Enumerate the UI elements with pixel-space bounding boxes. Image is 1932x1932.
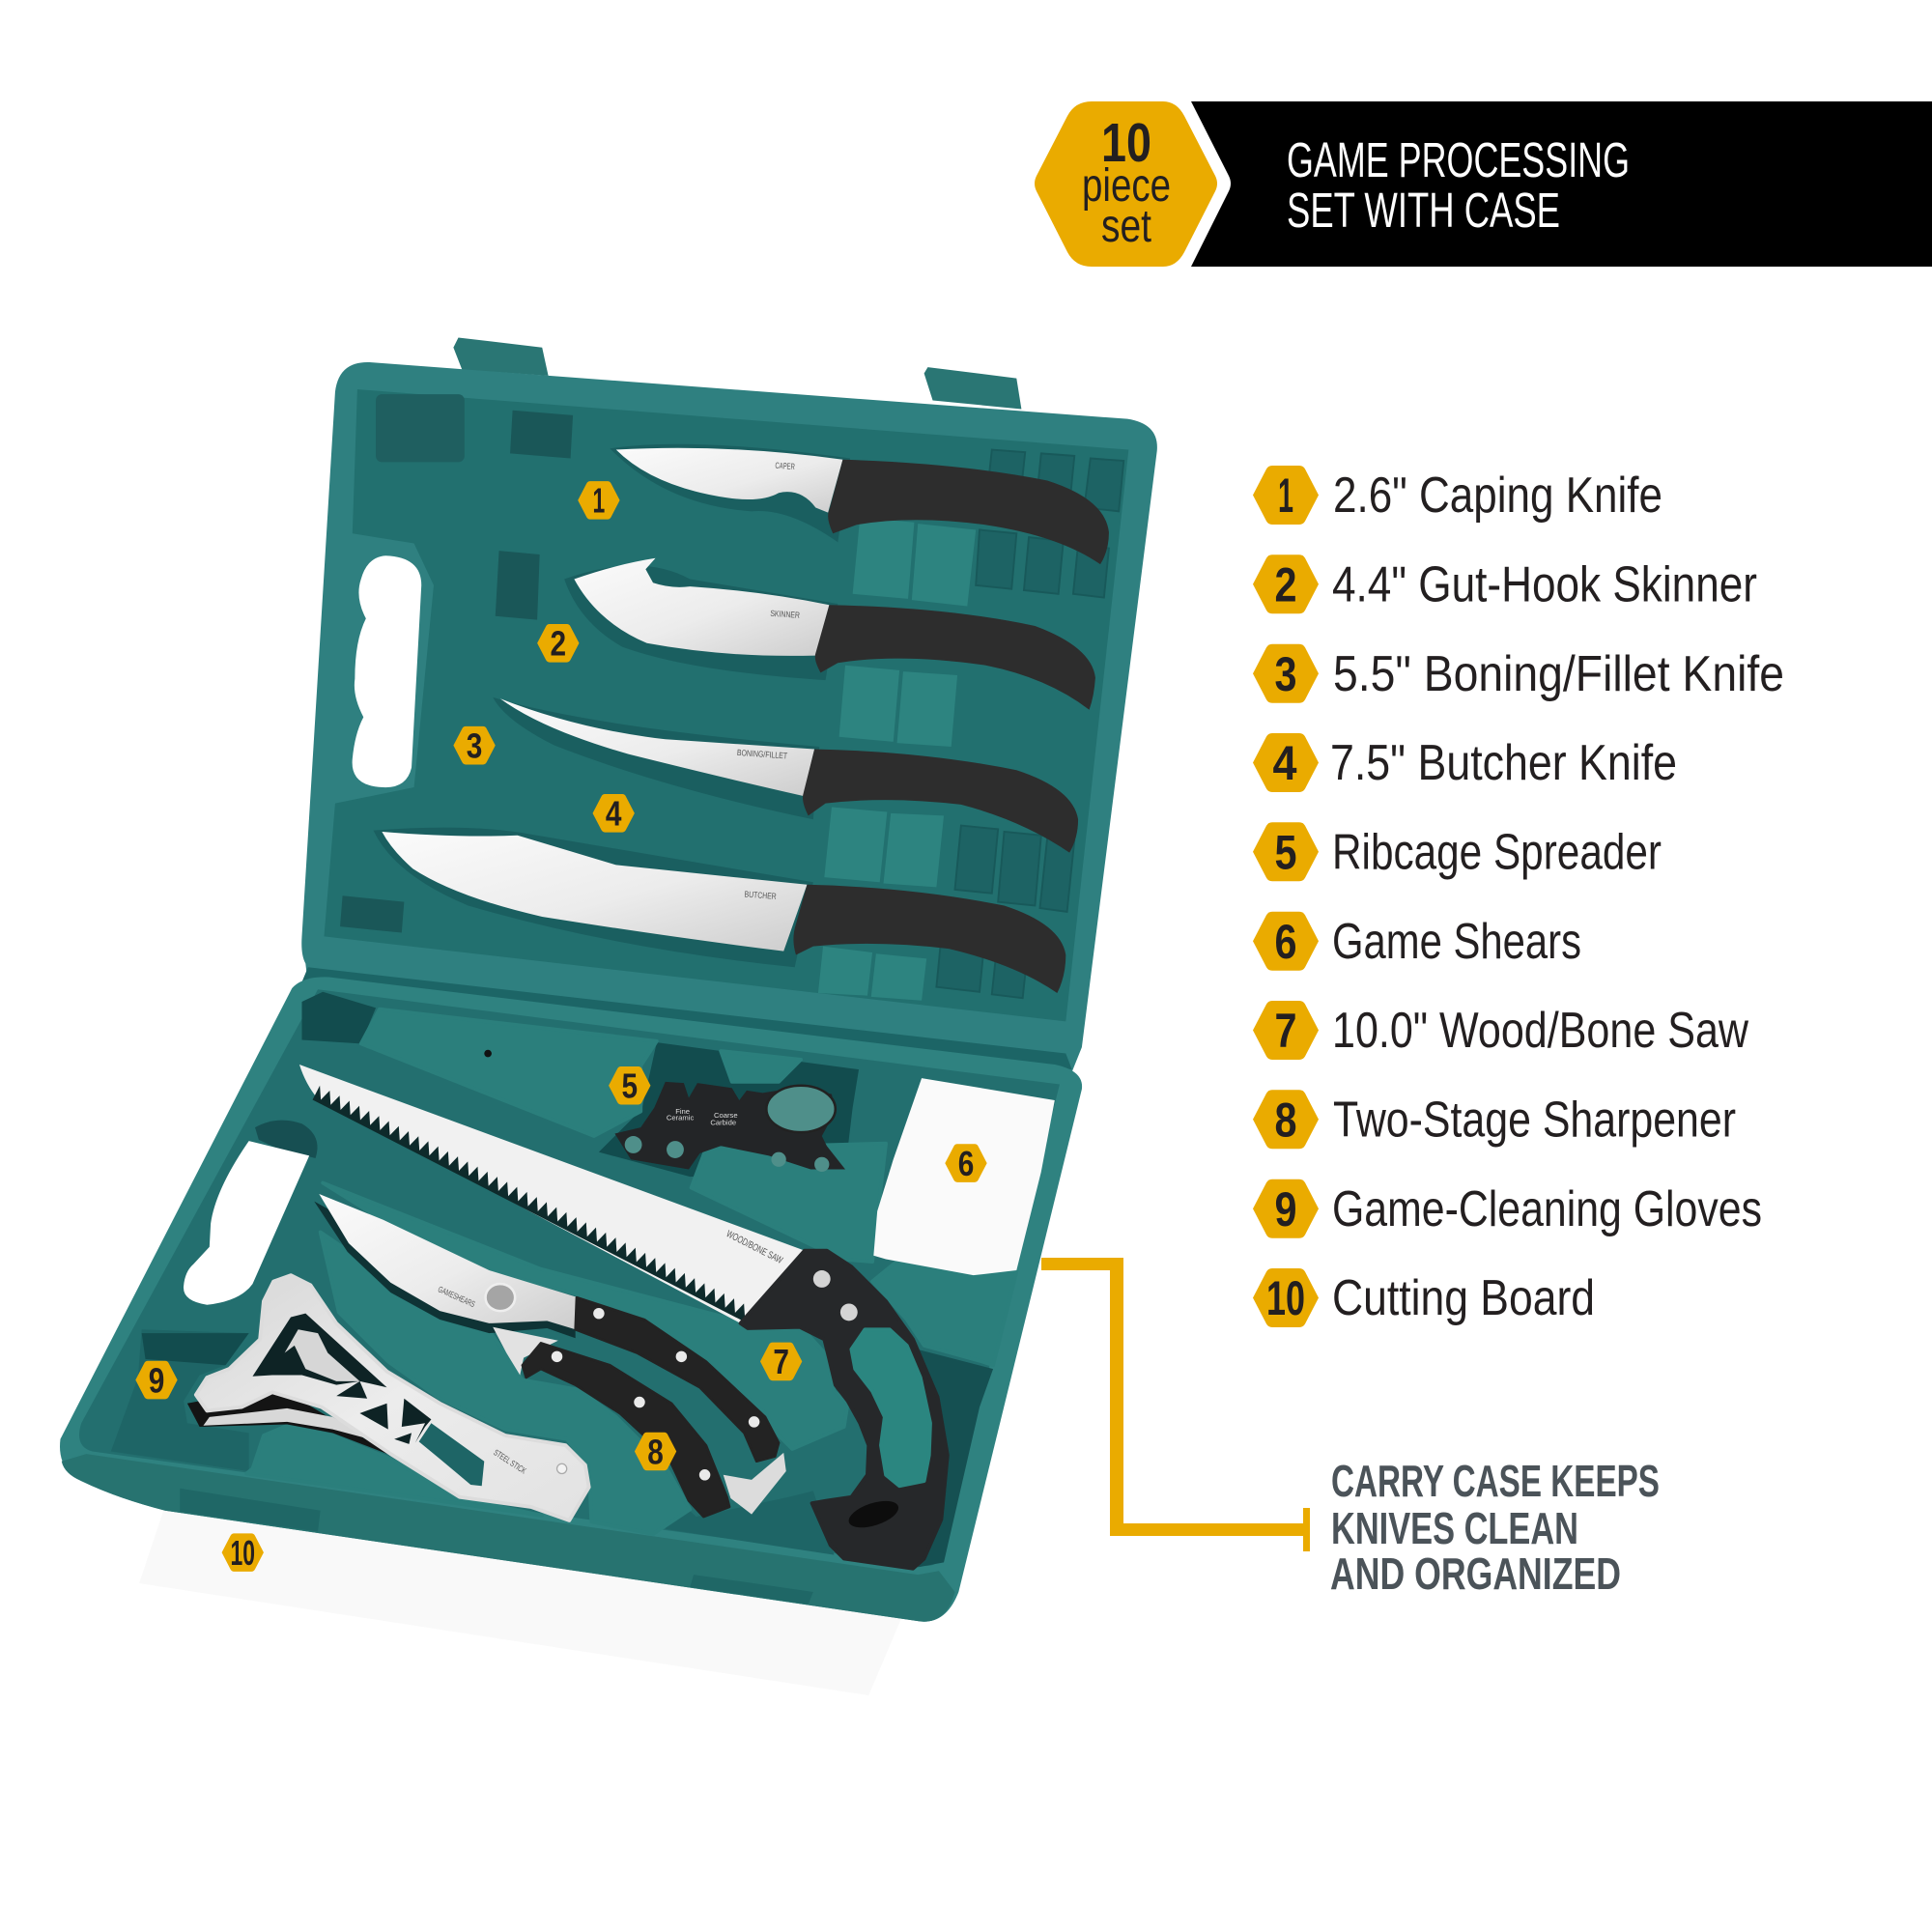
steel stick tool [187,1275,589,1520]
header banner [1035,101,1932,267]
caper blade [616,448,842,513]
hexagon text [1082,112,1171,252]
ribcage spreader tool: Coarse [714,1111,738,1120]
base outer shell [60,977,1082,1622]
marker 4 [593,794,635,834]
item 1: 2.6" Caping Knife [1333,468,1662,524]
wood bone saw: WOOD/BONE SAW [724,1229,784,1266]
callout bracket line [1041,1258,1310,1551]
item 7: 10.0" Wood/Bone Saw [1332,1003,1748,1059]
item 9: 9 [1275,1182,1296,1236]
callout text: KNIVES CLEAN [1331,1503,1578,1553]
marker 5 [609,1066,650,1105]
lid pockets [340,394,573,933]
black band [1191,101,1932,267]
base tray interior [79,989,1060,1566]
banner title: SET WITH CASE [1287,183,1560,238]
marker 3 [453,726,496,765]
marker 2 [537,624,579,664]
marker 8: 8 [647,1433,664,1471]
ribcage spreader tool: Ceramic [667,1113,694,1122]
tray raised platforms [246,1009,1016,1534]
lid hinge tabs [453,337,1021,409]
hexagon text: set [1101,201,1151,252]
knife 4: butcher: BUTCHER [744,890,777,901]
platform small hole [484,1050,492,1057]
marker 7 [760,1343,802,1381]
marker 9 [135,1361,178,1400]
item 2: 2 [1275,558,1296,612]
base front wall recesses [180,1489,813,1605]
item 6: Game Shears [1332,914,1581,970]
lid outer shell [301,362,1157,1072]
item list [1253,466,1784,1327]
front frame [196,1275,589,1520]
item 8 [1253,1090,1736,1149]
marker 1: 1 [593,482,605,521]
knife 3: boning fillet: BONING/FILLET [737,748,788,761]
piece count hexagon [1035,101,1217,267]
item 6 [1253,912,1581,971]
item 7: 7 [1275,1004,1296,1058]
callout text: CARRY CASE KEEPS [1331,1456,1660,1506]
hexagon text: 10 [1101,112,1151,174]
item 4: 4 [1273,736,1297,790]
frame cutouts [252,1314,431,1444]
item 3: 5.5" Boning/Fillet Knife [1333,646,1784,702]
base front wall [62,1454,955,1622]
marker 6: 6 [958,1145,974,1183]
shear handles [576,1297,779,1462]
illustration: open carry case with tools [60,337,1157,1695]
item 9 [1253,1179,1762,1238]
steel stick tool: STEEL STICK [492,1447,528,1476]
wood bone saw [299,1065,948,1569]
rear arm [187,1390,390,1455]
marker 10: 10 [231,1534,255,1573]
lid inner moulding [324,389,1128,1021]
saw handle [741,1251,948,1569]
ribcage spreader tool [614,1082,845,1172]
item 1: 1 [1278,469,1293,523]
saw teeth [313,1086,753,1322]
inner arm [285,1329,359,1381]
item 9: Game-Cleaning Gloves [1332,1181,1762,1237]
item 5: Ribcage Spreader [1332,825,1662,881]
game shears [314,1194,786,1517]
marker 6 [945,1144,987,1183]
caper handle [828,460,1109,564]
shear blades [319,1194,578,1329]
case lid [301,337,1157,1072]
item 4 [1253,733,1677,792]
image callout markers [135,481,987,1573]
knife 2: skinner [574,558,1095,710]
ribcage spreader tool: Carbide [710,1119,736,1127]
item 1 [1253,466,1662,525]
handle opening [353,555,421,787]
item 2: 4.4" Gut-Hook Skinner [1332,556,1757,612]
item 8: Two-Stage Sharpener [1333,1092,1736,1148]
case base [60,977,1082,1622]
callout text [1330,1456,1660,1599]
saw blade [299,1065,805,1323]
item 8: 8 [1275,1094,1296,1148]
marker 3: 3 [467,726,482,765]
knife 1: caper: CAPER [775,461,796,471]
marker 8 [635,1433,676,1471]
knife 4: butcher [382,832,1065,993]
item 3: 3 [1275,647,1296,701]
tray dark pockets [111,1329,835,1555]
knife 2: skinner: SKINNER [770,609,801,620]
lid bottom lip shadow [301,967,1072,1069]
item 10: Cutting Board [1332,1270,1595,1326]
knife recess shadows [373,444,850,967]
hexagon text: piece [1082,160,1171,212]
item 10: 10 [1266,1271,1305,1325]
marker 4: 4 [606,795,622,834]
base handle opening [184,1121,318,1305]
item 5: 5 [1275,825,1296,879]
game cleaning gloves pack [873,1078,1055,1275]
knife 1: caper [616,448,1109,564]
cutting board [139,1506,903,1695]
item 4: 7.5" Butcher Knife [1330,735,1677,791]
marker 5: 5 [621,1066,638,1105]
ribcage spreader tool: Fine [675,1107,690,1116]
banner title: GAME PROCESSING [1287,132,1630,187]
knife 3: boning fillet [500,698,1078,853]
shear recess shadow [314,1202,576,1338]
marker 9: 9 [149,1361,164,1400]
marker 10 [222,1533,264,1573]
game shears: GAMESHEARS [437,1284,476,1309]
callout text: AND ORGANIZED [1330,1548,1621,1599]
banner title [1287,132,1630,238]
marker 2: 2 [551,625,566,664]
item 7 [1253,1001,1748,1060]
item 5 [1253,822,1662,881]
lid right side cells [936,450,1123,998]
moulded knife clips [818,518,976,1001]
marker 1 [578,481,620,521]
item 10 [1253,1268,1595,1327]
marker 7: 7 [773,1343,789,1381]
saw grip [851,1329,930,1486]
item 6: 6 [1275,915,1296,969]
